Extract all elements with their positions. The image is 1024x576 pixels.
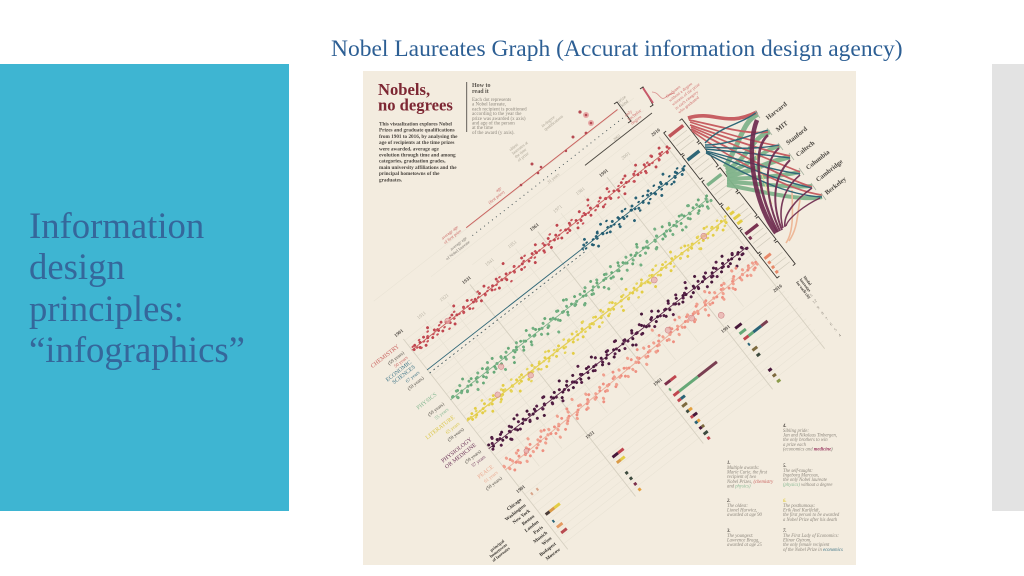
note 5: Ingeborg Marcoux, bbox=[782, 474, 819, 479]
callout: red note: in each category bbox=[674, 89, 700, 111]
university labels: Caltech bbox=[795, 140, 817, 159]
totals per city: 12 bbox=[811, 298, 818, 305]
flow: economics bbox=[705, 112, 822, 197]
year labels top bbox=[394, 128, 784, 495]
how to read it: according to the year the bbox=[472, 112, 522, 117]
city labels: New York bbox=[512, 509, 532, 526]
category labels: CHEMISTRY bbox=[370, 343, 401, 370]
panel: blue sidebar bbox=[0, 64, 289, 511]
flow: medicine bbox=[752, 120, 820, 233]
poster intro text: were awarded, average age bbox=[379, 146, 440, 152]
note 5: the only Nobel laureate bbox=[783, 478, 827, 483]
note 1: Marie Curie, the first bbox=[726, 471, 768, 476]
category labels: LITERATURE bbox=[425, 415, 457, 441]
callout: red note: without a degree bbox=[668, 81, 693, 103]
how to read it: prize was awarded (x axis) bbox=[472, 117, 526, 122]
how to read it: read it bbox=[472, 89, 489, 95]
note 3: 3. bbox=[727, 529, 731, 534]
totals per city: 5 bbox=[833, 327, 838, 332]
legend annotations: (first prize) bbox=[487, 189, 506, 205]
note 7: Elinor Ostrom, bbox=[782, 539, 811, 544]
note 5: (physics) bbox=[783, 483, 800, 488]
city labels: Budapest bbox=[539, 542, 558, 558]
category labels: PHYSICS bbox=[416, 392, 438, 411]
how to read it: of the award (y axis). bbox=[472, 131, 515, 136]
notes bbox=[726, 424, 843, 553]
note 6: Erik Axel Karlfeldt, bbox=[782, 509, 820, 514]
year labels top: 1991 bbox=[599, 168, 610, 179]
year labels top: 1941 bbox=[485, 258, 496, 268]
city labels: Paris bbox=[533, 525, 545, 536]
category labels: OR MEDICINE bbox=[444, 442, 478, 470]
note 4: medicine) bbox=[814, 447, 833, 452]
category labels: 65 years bbox=[445, 422, 461, 436]
city labels: of laureates bbox=[491, 546, 511, 563]
how to read it bbox=[466, 82, 527, 136]
totals per city: 15 bbox=[807, 293, 813, 299]
band: literature bbox=[462, 212, 734, 430]
city labels: Wien bbox=[541, 536, 553, 547]
year labels top: 1901 bbox=[394, 328, 405, 339]
year labels top: 1961 bbox=[653, 377, 664, 388]
legend bracket bbox=[614, 102, 631, 123]
flow: peace and literature bbox=[755, 150, 800, 243]
note 1: recipient of two bbox=[727, 475, 757, 480]
poster intro text: graduates. bbox=[379, 177, 403, 183]
year labels top: 1931 bbox=[585, 430, 596, 441]
city labels bbox=[472, 498, 562, 576]
how to read it: each recipient is positioned bbox=[472, 107, 527, 112]
legend annotations: average age bbox=[440, 224, 459, 240]
city labels: Moscow bbox=[545, 547, 562, 562]
note 6: a Nobel Prize after his death bbox=[783, 518, 838, 523]
panel: poster bbox=[363, 71, 856, 565]
university labels: Cambridge bbox=[815, 158, 844, 184]
legend annotations: of Nobel laureate bbox=[445, 239, 471, 261]
band: physiology or medicine bbox=[482, 238, 752, 456]
degree columns with brackets bbox=[664, 119, 795, 278]
year labels top: 1991 bbox=[721, 324, 732, 335]
main chart frame rotated -38deg bbox=[371, 98, 841, 562]
heading: information design principles bbox=[29, 205, 245, 370]
grid bbox=[374, 98, 823, 544]
heading: information design principles: principles: bbox=[29, 288, 184, 329]
university labels: Berkeley bbox=[824, 175, 848, 197]
university labels: Harvard bbox=[765, 101, 789, 122]
legend prize bracket and callout bbox=[640, 87, 675, 107]
note 6: The posthumous: bbox=[783, 504, 816, 509]
category labels: 55 years bbox=[434, 408, 450, 422]
legend annotations: laureates at bbox=[511, 139, 529, 156]
heading: information design principles: Information bbox=[29, 205, 204, 246]
year labels top: 1921 bbox=[439, 293, 451, 303]
small bracket labels: degree bbox=[630, 114, 642, 126]
totals per city: 9 bbox=[816, 305, 820, 310]
category labels: (59 years) bbox=[407, 376, 426, 392]
category labels: 57 years bbox=[471, 455, 487, 469]
year labels top: 1911 bbox=[417, 311, 428, 321]
city labels: Chicago bbox=[506, 498, 523, 512]
category labels: 50 years bbox=[394, 356, 409, 370]
city labels: hometowns bbox=[489, 542, 508, 559]
category labels bbox=[367, 343, 504, 504]
how to read it: Each dot represents bbox=[472, 98, 511, 103]
note 2: awarded at age 90 bbox=[727, 513, 763, 518]
small bracket labels: bachelor bbox=[627, 108, 643, 122]
note 4: (economics and bbox=[783, 447, 814, 452]
heading: information design principles: “infographics” bbox=[29, 329, 245, 370]
note 1: Multiple awards: bbox=[726, 466, 760, 471]
note 7: economics bbox=[823, 548, 843, 553]
note 4: 4. bbox=[783, 424, 787, 429]
how to read it: at the time bbox=[472, 126, 494, 131]
city labels: Boston bbox=[522, 514, 536, 527]
how to read it: and age of the person bbox=[472, 122, 515, 126]
panel: grey right strip bbox=[992, 64, 1024, 511]
totals per city: 8 bbox=[820, 310, 825, 316]
band: peace bbox=[496, 252, 763, 477]
category labels: (59 years) bbox=[387, 351, 406, 367]
year labels top: 1961 bbox=[529, 223, 541, 233]
note 2: The oldest: bbox=[727, 504, 748, 509]
medal caption: Medal bbox=[802, 275, 813, 286]
legend annotations: 2001 bbox=[612, 133, 622, 142]
poster intro text: This visualization explores Nobel bbox=[379, 122, 452, 128]
totals per city: 21 bbox=[803, 287, 809, 294]
heading: information design principles: design bbox=[29, 246, 125, 287]
totals per city: 7 bbox=[824, 315, 830, 321]
note 3: Lawrence Bragg, bbox=[726, 539, 759, 544]
category labels: 67 years bbox=[405, 371, 421, 385]
note 2: Lionel Hurwicz, bbox=[726, 509, 757, 514]
poster intro text: principal hometowns of the bbox=[379, 171, 440, 177]
year labels top: 2001 bbox=[621, 151, 632, 162]
medal caption: laureates bbox=[799, 277, 812, 293]
year labels top: 1971 bbox=[553, 204, 564, 215]
small bracket labels: kind bbox=[620, 98, 630, 108]
small bracket labels: prize bbox=[617, 94, 627, 104]
poster title: Nobels, bbox=[378, 80, 430, 99]
note 1: 1. bbox=[727, 461, 731, 466]
legend annotations: in-degree bbox=[540, 114, 556, 128]
note 6: the first person to be awarded bbox=[783, 513, 840, 518]
note 7: of the Nobel Prize in bbox=[783, 548, 823, 553]
category labels: (59 years) bbox=[427, 402, 446, 418]
legend annotations: qualifications bbox=[543, 114, 564, 132]
poster intro text: categories, graduation grades, bbox=[379, 159, 446, 165]
note 5: without a degree bbox=[800, 483, 832, 488]
category labels: (59 years) bbox=[464, 449, 483, 465]
how to read it: How to bbox=[472, 83, 490, 89]
legend age lines bbox=[466, 94, 652, 247]
year labels top: 1931 bbox=[462, 276, 473, 286]
legend annotations: of prize bbox=[516, 151, 530, 163]
totals per city: 4 bbox=[837, 332, 843, 338]
year labels top: 2016 bbox=[651, 128, 662, 138]
university brackets bbox=[755, 111, 826, 200]
year labels top: 2016 bbox=[773, 284, 784, 294]
small bracket labels bbox=[617, 94, 646, 126]
legend dots bbox=[520, 110, 594, 186]
legend annotations: of first prize bbox=[443, 228, 462, 245]
note 2: 2. bbox=[727, 499, 731, 504]
note 7: 7. bbox=[783, 529, 787, 534]
category labels: PEACE bbox=[477, 464, 495, 480]
callout: red note: who graduated bbox=[677, 94, 701, 115]
legend annotations: age bbox=[495, 185, 502, 193]
small bracket labels: only bbox=[624, 109, 633, 118]
note 1: Nobel Prizes, bbox=[726, 480, 753, 485]
flows: universities bbox=[688, 111, 826, 243]
note 4: a prize each bbox=[783, 443, 807, 448]
highlighted laureates bbox=[430, 160, 753, 465]
note 3: The youngest: bbox=[727, 534, 754, 539]
note 4: the only brothers to win bbox=[783, 438, 828, 443]
note 3: awarded at age 25 bbox=[727, 543, 763, 548]
poster intro text: from 1901 to 2016, by analysing the bbox=[379, 134, 458, 140]
category labels: SCIENCES bbox=[391, 364, 417, 386]
note 5: 5. bbox=[783, 464, 787, 469]
flow: chemistry bbox=[688, 112, 822, 195]
category labels: ECONOMIC bbox=[385, 360, 413, 383]
category labels: PHYSIOLOGY bbox=[441, 436, 474, 464]
title: Nobel Laureates Graph (Accurat information design agency) bbox=[331, 36, 903, 62]
legend annotations: oldest bbox=[508, 142, 519, 152]
how to read it: a Nobel laureate, bbox=[472, 103, 506, 108]
note 1: (chemistry bbox=[753, 480, 774, 485]
callout: red note: winners of the prize bbox=[671, 82, 701, 107]
university labels: Columbia bbox=[805, 148, 832, 172]
legend annotations bbox=[416, 89, 622, 268]
flow: physics bbox=[725, 114, 822, 198]
year labels top: 1951 bbox=[507, 240, 519, 250]
poster intro text: age of recipients at the time prizes bbox=[379, 140, 454, 146]
city labels: principal bbox=[489, 538, 505, 553]
poster title: no degrees bbox=[378, 96, 453, 115]
medal caption: for each city bbox=[795, 280, 812, 300]
university labels: MIT bbox=[775, 120, 790, 134]
note 1: and bbox=[727, 484, 735, 489]
legend annotations: the time bbox=[514, 147, 527, 159]
city labels: London bbox=[524, 520, 540, 534]
band: physics bbox=[445, 191, 717, 410]
legend annotations: average age bbox=[449, 235, 468, 252]
band: chemistry bbox=[405, 139, 675, 356]
totals per city: 6 bbox=[829, 321, 834, 327]
category labels: 61 years bbox=[483, 471, 499, 485]
city labels: Washington bbox=[505, 503, 528, 523]
poster intro text: main university affiliations and the bbox=[379, 165, 457, 171]
year labels top: 1981 bbox=[575, 187, 587, 197]
callout: red note: Graduates bbox=[665, 84, 681, 99]
poster intro text: evolution through time and among bbox=[379, 152, 456, 158]
note 5: The self-taught: bbox=[783, 469, 813, 474]
year labels top: 1901 bbox=[516, 485, 527, 495]
note 1: physics) bbox=[734, 484, 751, 489]
note 4: Jan and Nikolaas Tinbergen, bbox=[783, 434, 837, 439]
university labels bbox=[765, 101, 848, 197]
note 6: 6. bbox=[783, 499, 787, 504]
note 7: the only female recipient bbox=[783, 543, 830, 548]
category labels: (59 years) bbox=[485, 476, 504, 492]
city bars by period bbox=[527, 310, 802, 546]
city labels: Munich bbox=[533, 531, 549, 545]
poster intro text: Prizes and graduate qualifications bbox=[379, 128, 455, 134]
note 4: Sibling pride: bbox=[783, 429, 809, 434]
category labels: (59 years) bbox=[447, 427, 466, 443]
university labels: Stanford bbox=[785, 126, 809, 147]
legend annotations: 31 years bbox=[546, 172, 561, 184]
band: economic sciences bbox=[422, 161, 692, 378]
note 7: The First Lady of Economics: bbox=[783, 534, 839, 539]
